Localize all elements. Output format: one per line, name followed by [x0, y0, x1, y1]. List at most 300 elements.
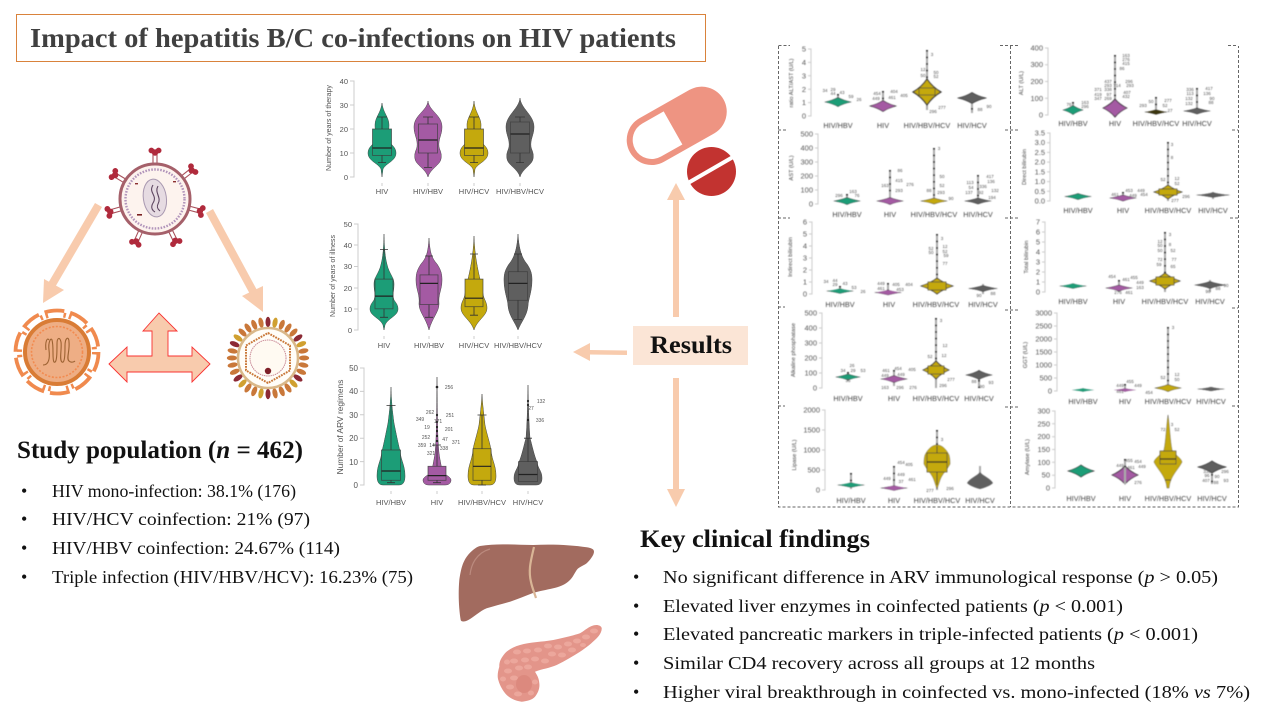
- plot: total bilirubin: 5: [1036, 238, 1040, 246]
- plot: alkaline phosphatase: 3: [940, 318, 943, 323]
- chart: ARV regimens: HIV/HCV: [513, 498, 543, 507]
- study population heading: Study population (n = 462): [17, 437, 303, 464]
- plot: amylase: 200: [1037, 432, 1050, 441]
- chart: years of therapy: 0: [344, 173, 348, 182]
- plot: ratio ALT/AST: ratio ALT/AST (U/L): [789, 58, 795, 108]
- chart: ARV regimens: 0: [354, 481, 359, 490]
- study population list: HIV mono-infection: 38.1% (176): [52, 481, 296, 502]
- plot: indirect bilirubin: 3: [941, 236, 944, 241]
- plot: ratio ALT/AST: 2: [802, 85, 806, 94]
- plot: amylase: 449: [1116, 463, 1124, 468]
- chart: ARV regimens: 20: [349, 434, 359, 443]
- study population list: •: [21, 481, 27, 501]
- key findings list: •: [633, 624, 639, 644]
- chart: years of illness: 10: [344, 305, 352, 314]
- plot: AST: 163: [849, 189, 857, 194]
- plot: alkaline phosphatase: 100: [804, 368, 817, 378]
- plot: ALT: 0: [1039, 110, 1043, 120]
- plot: ratio ALT/AST: 0: [802, 112, 806, 120]
- plot: direct bilirubin: 296: [1182, 194, 1190, 199]
- plot: AST: 92: [978, 190, 984, 195]
- plot: ALT: 432: [1122, 94, 1130, 99]
- plot: ratio ALT/AST: 277: [938, 105, 946, 110]
- plot: amylase: 72: [1160, 427, 1166, 432]
- plot: ALT: 714: [1113, 83, 1121, 88]
- plot: indirect bilirubin: [788, 218, 998, 309]
- plot: AST: 163: [881, 183, 889, 188]
- icon: pancreas: [498, 625, 602, 702]
- arrow: HIV to left virus: [43, 203, 102, 303]
- chart: ARV regimens: 336: [536, 418, 544, 424]
- plot: AST: 86: [897, 168, 903, 173]
- plot: alkaline phosphatase: 29: [850, 368, 856, 373]
- plot: amylase: 50: [1042, 471, 1050, 480]
- plot: alkaline phosphatase: 52: [927, 354, 933, 359]
- plot: total bilirubin: 65: [1170, 264, 1176, 269]
- plot: ALT: 132: [1185, 101, 1193, 106]
- plot: AST: 194: [988, 195, 996, 200]
- chart: ARV regimens: 251: [446, 413, 454, 419]
- chart: ARV regimens: 371: [452, 440, 460, 446]
- chart: ARV regimens: 30: [349, 411, 359, 420]
- plot: alkaline phosphatase: HIV/HCV: [964, 394, 994, 403]
- plot: indirect bilirubin: 6: [803, 218, 807, 226]
- chart: years of illness: HIV/HCV: [459, 341, 489, 350]
- study population list: [21, 481, 413, 588]
- plot: direct bilirubin: 449: [1137, 188, 1145, 193]
- plot: AST: AST (U/L): [789, 155, 795, 181]
- plot: lipase: HIV: [888, 496, 900, 505]
- plot: ratio ALT/AST: 405: [900, 93, 908, 98]
- plot: indirect bilirubin: 52: [928, 246, 934, 251]
- plot: indirect bilirubin: 4: [803, 242, 807, 250]
- plot: ALT: 76: [1066, 102, 1072, 107]
- plot: AST: 400: [800, 144, 813, 152]
- plot: total bilirubin: 6: [1036, 228, 1040, 236]
- plot: alkaline phosphatase: HIV/HBV/HCV: [913, 394, 959, 403]
- chart: ARV regimens: 338: [440, 446, 448, 452]
- plot: indirect bilirubin: 59: [943, 253, 949, 258]
- plot: AST: 50: [939, 174, 945, 179]
- icon: tablet: [687, 147, 736, 196]
- plot: ratio ALT/AST: 50: [920, 73, 926, 78]
- plot: total bilirubin: 50: [1157, 248, 1163, 253]
- icon: liver: [459, 544, 594, 622]
- plot: indirect bilirubin: 34: [823, 279, 829, 284]
- plot: amylase: 407: [1202, 478, 1210, 483]
- plot: AST: 276: [906, 182, 914, 187]
- plot: amylase: 93: [1223, 478, 1229, 483]
- chart: years of illness: [329, 220, 542, 350]
- plot: lipase: HIV/HBV: [836, 496, 866, 505]
- plot: direct bilirubin: 461: [1111, 192, 1119, 197]
- key findings list: Elevated pancreatic markers in triple-infected patients ( p < 0.001): [663, 624, 1198, 645]
- plot: alkaline phosphatase: 26: [849, 363, 855, 368]
- key findings list: Elevated liver enzymes in coinfected patients ( p < 0.001): [663, 596, 1123, 617]
- plot: GGT: HIV: [1119, 397, 1131, 406]
- chart: years of illness: 30: [344, 262, 352, 271]
- plot: direct bilirubin: 1.5: [1035, 167, 1045, 176]
- plot: AST: 296: [835, 193, 843, 198]
- plot: direct bilirubin: 3.5: [1035, 128, 1045, 138]
- plot: alkaline phosphatase: [791, 308, 994, 403]
- plot: indirect bilirubin: 453: [896, 287, 904, 292]
- plot: AST: HIV: [884, 210, 896, 219]
- plot: amylase: 461: [1127, 465, 1135, 470]
- plot: GGT: HIV/HCV: [1196, 397, 1226, 406]
- plot: amylase: 336: [1203, 469, 1211, 474]
- plot: alkaline phosphatase: 200: [804, 354, 817, 362]
- plot: ratio ALT/AST: [789, 44, 992, 130]
- plot: indirect bilirubin: 50: [928, 250, 934, 255]
- plot: total bilirubin: 12: [1157, 239, 1163, 244]
- plot: ratio ALT/AST: 34: [822, 88, 828, 93]
- plot: GGT: 2000: [1035, 334, 1052, 344]
- chart: ARV regimens: 201: [445, 427, 453, 433]
- plot: indirect bilirubin: 2: [803, 266, 807, 274]
- arrow: HIV to right virus: [206, 209, 263, 312]
- plot: total bilirubin: 50: [1157, 243, 1163, 248]
- plot: lipase: 454: [897, 460, 905, 465]
- icon: HIV virus: [104, 148, 206, 249]
- chart: years of therapy: HIV/HBV/HCV: [496, 187, 544, 196]
- plot: lipase: HIV/HCV: [965, 496, 995, 505]
- plot: ALT: 276: [1122, 57, 1130, 62]
- plot: AST: 90: [948, 196, 954, 201]
- study population list: Triple infection (HIV/HBV/HCV): 16.23% (75): [52, 567, 413, 588]
- plot: ALT: 88: [1208, 100, 1214, 105]
- plot: ALT: 347: [1094, 96, 1102, 101]
- plot: indirect bilirubin: HIV/HBV: [825, 300, 855, 309]
- plot: GGT: 449: [1116, 383, 1124, 388]
- chart: years of illness: HIV/HBV/HCV: [494, 341, 542, 350]
- chart: years of therapy: HIV/HCV: [459, 187, 489, 196]
- plot: ratio ALT/AST: 1: [802, 98, 806, 107]
- plot: alkaline phosphatase: HIV/HBV: [833, 394, 863, 403]
- plot: total bilirubin: 449: [1136, 280, 1144, 285]
- plot: alkaline phosphatase: 461: [882, 368, 890, 373]
- plot: alkaline phosphatase: 12: [942, 343, 948, 348]
- plot: ALT: 415: [1122, 61, 1130, 66]
- chart: ARV regimens: 171: [434, 419, 442, 425]
- plot: amylase: HIV/HCV: [1197, 494, 1227, 503]
- plot: AST: 415: [895, 178, 903, 183]
- plot: alkaline phosphatase: Alkaline phosphatase: [791, 323, 797, 377]
- plot: indirect bilirubin: 461: [877, 286, 885, 291]
- plot: AST: 336: [979, 184, 987, 189]
- plot: ALT: 407: [1123, 90, 1131, 95]
- plot: direct bilirubin: 3: [1171, 142, 1174, 147]
- key findings list: No significant difference in ARV immunological response ( p > 0.05): [663, 567, 1218, 588]
- icon: left virus: [16, 310, 98, 394]
- plot: ratio ALT/AST: 449: [872, 96, 880, 101]
- arrow: results to pill: [667, 183, 685, 317]
- plot: indirect bilirubin: 5: [803, 230, 807, 238]
- study population list: •: [21, 538, 27, 558]
- chart: ARV regimens: 40: [349, 387, 359, 396]
- study population list: •: [21, 567, 27, 587]
- plot: direct bilirubin: 0.5: [1035, 187, 1045, 196]
- plot: GGT: [1023, 308, 1226, 406]
- arrow: double-headed T connector: [109, 313, 210, 382]
- plot: amylase: 296: [1221, 469, 1229, 474]
- chart: ARV regimens: 27: [528, 406, 534, 412]
- plot: alkaline phosphatase: 90: [979, 384, 985, 389]
- plot: ALT: 277: [1164, 98, 1172, 103]
- plot: AST: 54: [968, 185, 974, 190]
- plot: amylase: 0: [1046, 484, 1050, 492]
- plot: direct bilirubin: 1.0: [1035, 177, 1045, 186]
- plot: amylase: 455: [1125, 458, 1133, 463]
- plot: alkaline phosphatase: 296: [896, 385, 904, 390]
- plot: indirect bilirubin: 405: [892, 282, 900, 287]
- plot: ALT: 163: [1122, 53, 1130, 58]
- plot: AST: HIV/HBV: [832, 210, 862, 219]
- plot: amylase: [1025, 406, 1229, 503]
- chart: years of therapy: HIV: [376, 187, 388, 196]
- plot: alkaline phosphatase: 163: [881, 385, 889, 390]
- study population list: HIV/HCV coinfection: 21% (97): [52, 509, 310, 530]
- results label: Results: [650, 332, 732, 359]
- plot: lipase: 277: [926, 488, 934, 493]
- plot: GGT: 2500: [1035, 322, 1052, 330]
- plot: GGT: 1500: [1035, 348, 1052, 356]
- chart: years of therapy: HIV/HBV: [413, 187, 443, 196]
- chart: years of illness: 40: [344, 241, 352, 250]
- results label: [633, 326, 748, 365]
- plot: lipase: 500: [807, 466, 820, 474]
- icon: right virus: [227, 317, 309, 399]
- plot: amylase: 276: [1134, 480, 1142, 485]
- plot: indirect bilirubin: 77: [942, 261, 948, 266]
- plot: direct bilirubin: 52: [1160, 177, 1166, 182]
- chart: years of therapy: 40: [340, 77, 348, 86]
- plot: indirect bilirubin: 44: [832, 278, 838, 283]
- plot: amylase: HIV: [1119, 494, 1131, 503]
- plot: amylase: 52: [1174, 427, 1180, 432]
- plot: ratio ALT/AST: 26: [856, 97, 862, 102]
- plot: alkaline phosphatase: 35: [845, 378, 851, 383]
- plot: AST: 200: [800, 172, 813, 180]
- plot: ALT: 200: [1030, 77, 1043, 86]
- plot: AST: 88: [926, 188, 932, 193]
- chart: ARV regimens: 256: [445, 385, 453, 391]
- plot: ALT: HIV/HBV: [1058, 119, 1088, 128]
- plot: amylase: 454: [1134, 459, 1142, 464]
- plot: total bilirubin: 1: [1036, 278, 1040, 286]
- plot: lipase: [792, 406, 995, 505]
- plot: ratio ALT/AST: 29: [830, 87, 836, 92]
- chart: years of therapy: 20: [340, 125, 348, 134]
- plot: indirect bilirubin: 26: [860, 289, 866, 294]
- plot: ALT: 437: [1104, 79, 1112, 84]
- plot: indirect bilirubin: HIV/HBV/HCV: [913, 300, 959, 309]
- plot: alkaline phosphatase: 277: [947, 377, 955, 382]
- plot: total bilirubin: 3: [1169, 232, 1172, 237]
- plot: amylase: 150: [1037, 445, 1050, 454]
- plot: indirect bilirubin: HIV/HCV: [968, 300, 998, 309]
- plot: ALT: 136: [1203, 91, 1211, 96]
- plot: ratio ALT/AST: 3: [802, 71, 806, 80]
- plot: alkaline phosphatase: 0: [813, 384, 817, 392]
- plot: total bilirubin: 276: [1114, 290, 1122, 295]
- chart: years of therapy: [325, 77, 544, 196]
- plot: alkaline phosphatase: 454: [894, 366, 902, 371]
- plot: GGT: GGT (U/L): [1023, 342, 1029, 368]
- plot: indirect bilirubin: 90: [976, 293, 982, 298]
- plot: lipase: 1000: [803, 446, 820, 454]
- chart: ARV regimens: 321: [427, 451, 435, 457]
- plot: direct bilirubin: 453: [1125, 188, 1133, 193]
- plot: total bilirubin: HIV/HBV: [1058, 297, 1088, 306]
- plot: ALT: 100: [1030, 94, 1043, 103]
- plot: AST: 0: [809, 200, 813, 208]
- plot: AST: 293: [937, 190, 945, 195]
- plot: AST: 132: [991, 188, 999, 193]
- chart: ARV regimens: 132: [537, 399, 545, 405]
- plot: ALT: 293: [1126, 83, 1134, 88]
- plot: ratio ALT/AST: HIV: [877, 121, 889, 130]
- plot: lipase: 405: [905, 462, 913, 467]
- plot: direct bilirubin: 454: [1140, 192, 1148, 197]
- chart: ARV regimens: 10: [349, 458, 359, 467]
- plot: AST: HIV/HCV: [963, 210, 993, 219]
- plot: ratio ALT/AST: 12: [920, 67, 926, 72]
- plot: indirect bilirubin: 404: [905, 282, 913, 287]
- plot: ALT: 132: [1185, 96, 1193, 101]
- plot: GGT: 0: [1048, 386, 1052, 396]
- chart: years of therapy: 10: [340, 149, 348, 158]
- plot: ratio ALT/AST: 454: [873, 91, 881, 96]
- plot: ALT: [1019, 44, 1215, 128]
- plot: total bilirubin: 0: [1036, 288, 1040, 296]
- study population list: •: [21, 509, 27, 529]
- chart: ARV regimens: Number of ARV regimens: [335, 380, 345, 474]
- plot: ratio ALT/AST: 52: [933, 74, 939, 79]
- plot: indirect bilirubin: 88: [990, 291, 996, 296]
- plot: direct bilirubin: 3.0: [1035, 138, 1045, 147]
- plot: lipase: 0: [816, 486, 820, 494]
- plot: ALT: 27: [1167, 108, 1173, 113]
- plot: ratio ALT/AST: 3: [931, 52, 934, 57]
- plot: direct bilirubin: 449: [1129, 193, 1137, 198]
- plot: direct bilirubin: HIV/HBV/HCV: [1145, 206, 1191, 215]
- plot: AST: 76: [854, 193, 860, 198]
- plot: amylase: 88: [1213, 480, 1219, 485]
- plot: ALT: 400: [1030, 44, 1043, 52]
- plot: ALT: 50: [1148, 99, 1154, 104]
- plot: direct bilirubin: [1022, 128, 1229, 215]
- plot: ALT: 90: [1209, 96, 1215, 101]
- plot: amylase: 449: [1138, 464, 1146, 469]
- plot: lipase: 2000: [803, 406, 820, 414]
- plot: AST: [789, 130, 999, 219]
- plot: amylase: 3: [1171, 422, 1174, 427]
- plot: indirect bilirubin: 0: [803, 290, 807, 298]
- plot: indirect bilirubin: 53: [851, 285, 857, 290]
- plot: indirect bilirubin: 43: [842, 281, 848, 286]
- plot: AST: HIV/HBV/HCV: [911, 210, 957, 219]
- chart: ARV regimens: HIV/HBV/HCV: [458, 498, 506, 507]
- chart: years of illness: 20: [344, 284, 352, 293]
- plot: alkaline phosphatase: 93: [988, 380, 994, 385]
- plot: total bilirubin: 454: [1108, 274, 1116, 279]
- plot: direct bilirubin: 0.0: [1035, 196, 1045, 206]
- plot: ALT: 338: [1104, 87, 1112, 92]
- plot: total bilirubin: 59: [1156, 262, 1162, 267]
- plot: alkaline phosphatase: 296: [939, 383, 947, 388]
- plot: direct bilirubin: 12: [1174, 176, 1180, 181]
- plot: direct bilirubin: 2.0: [1035, 158, 1045, 167]
- plot: indirect bilirubin: 1: [803, 278, 807, 286]
- plot: direct bilirubin: 277: [1171, 198, 1179, 203]
- plot: ratio ALT/AST: 404: [890, 89, 898, 94]
- plot: alkaline phosphatase: 53: [860, 368, 866, 373]
- plot: AST: 100: [800, 186, 813, 194]
- plot: amylase: 250: [1037, 419, 1050, 428]
- plot: direct bilirubin: HIV: [1117, 206, 1129, 215]
- key findings list: Higher viral breakthrough in coinfected vs. mono-infected (18% vs 7%): [663, 682, 1250, 703]
- plot: ratio ALT/AST: 44: [830, 91, 836, 96]
- plot: alkaline phosphatase: 500: [804, 308, 817, 318]
- plot: GGT: 50: [1174, 377, 1180, 382]
- plot: AST: 300: [800, 158, 813, 166]
- plot: direct bilirubin: 2.5: [1035, 148, 1045, 157]
- key findings list: •: [633, 682, 639, 702]
- key findings list: Similar CD4 recovery across all groups at 12 months: [663, 653, 1095, 673]
- plot: ALT: ALT (U/L): [1019, 71, 1025, 95]
- plot: alkaline phosphatase: 276: [909, 385, 917, 390]
- plot: indirect bilirubin: 52: [942, 249, 948, 254]
- plot: total bilirubin: 455: [1130, 275, 1138, 280]
- arrow: results to charts: [573, 343, 627, 361]
- plot: ratio ALT/AST: 43: [839, 90, 845, 95]
- plot: lipase: Lipase (U/L): [792, 439, 798, 470]
- plot: total bilirubin: 461: [1125, 290, 1133, 295]
- plot: ratio ALT/AST: 50: [933, 70, 939, 75]
- plot: alkaline phosphatase: HIV: [888, 394, 900, 403]
- plot: ALT: HIV/HCV: [1182, 119, 1212, 128]
- plot: ratio ALT/AST: 296: [929, 109, 937, 114]
- plot: amylase: HIV/HBV: [1066, 494, 1096, 503]
- plot: alkaline phosphatase: 449: [881, 373, 889, 378]
- plot: alkaline phosphatase: 34: [840, 368, 846, 373]
- plot: alkaline phosphatase: 449: [897, 372, 905, 377]
- plot: ratio ALT/AST: 5: [802, 44, 806, 54]
- plot: total bilirubin: 77: [1171, 257, 1177, 262]
- chart: years of illness: 0: [348, 326, 352, 335]
- plot: ratio ALT/AST: 461: [888, 95, 896, 100]
- plot: total bilirubin: 7: [1036, 218, 1040, 226]
- plot: GGT: 454: [1145, 390, 1153, 395]
- chart: years of illness: Number of years of illness: [329, 235, 337, 317]
- chart: ARV regimens: 262: [426, 410, 434, 416]
- plot: total bilirubin: HIV/HCV: [1195, 297, 1225, 306]
- chart: years of illness: HIV/HBV: [414, 341, 444, 350]
- plot: ratio ALT/AST: HIV/HBV: [823, 121, 853, 130]
- plot: lipase: 296: [946, 486, 954, 491]
- chart: ARV regimens: HIV/HBV: [376, 498, 406, 507]
- plot: total bilirubin: 88: [1215, 286, 1221, 291]
- panel: laboratory violin plots: [778, 44, 1238, 507]
- plot: AST: 3: [938, 146, 941, 151]
- plot: lipase: 37: [898, 479, 904, 484]
- title: [16, 14, 706, 62]
- plot: GGT: 12: [1174, 372, 1180, 377]
- plot: ALT: 86: [1119, 66, 1125, 71]
- plot: ratio ALT/AST: 4: [802, 58, 806, 67]
- study population list: HIV/HBV coinfection: 24.67% (114): [52, 538, 340, 559]
